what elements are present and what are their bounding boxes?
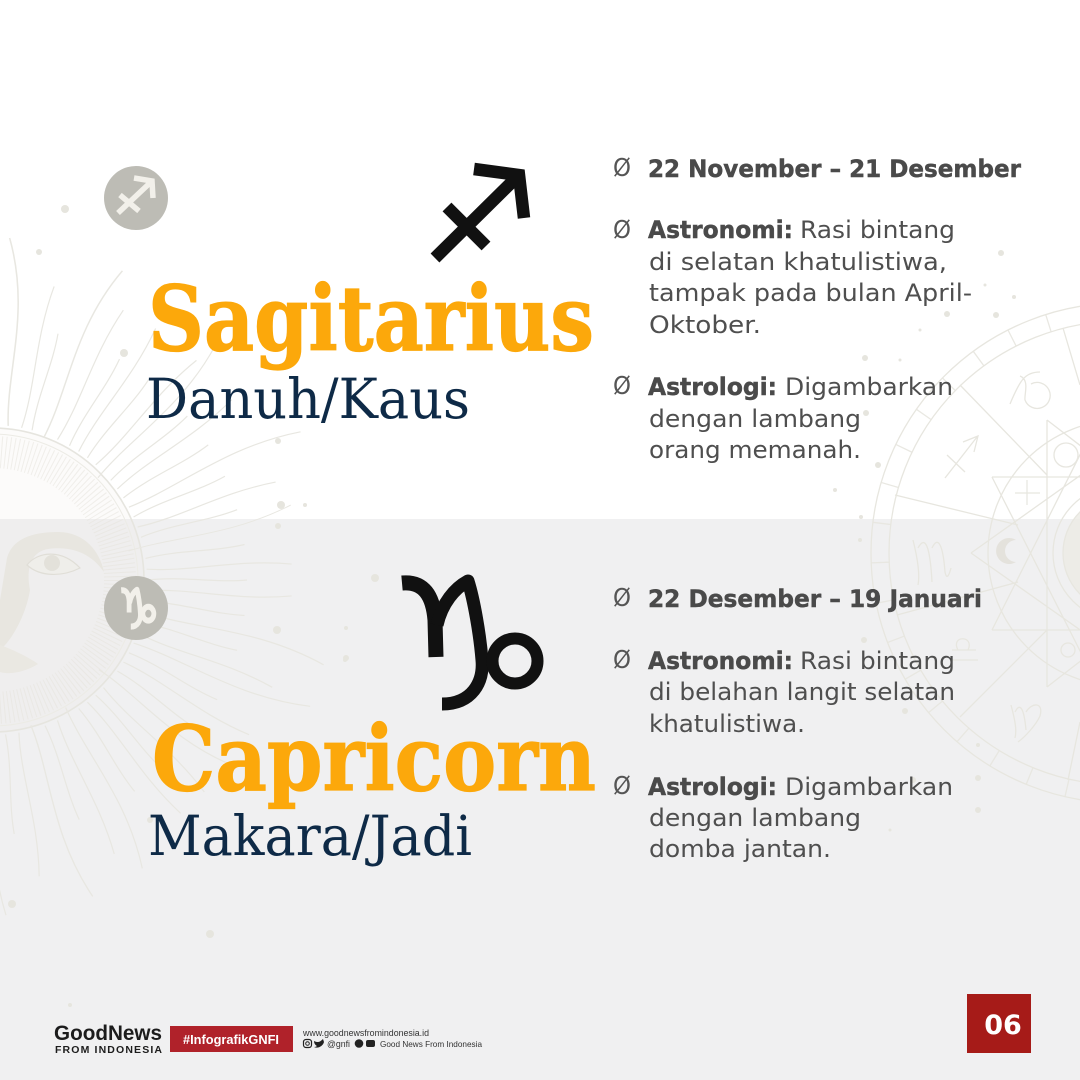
text block: astronomi: Rasi bintang bbox=[800, 647, 955, 675]
background lower panel bbox=[0, 519, 1080, 1080]
text block: astronomi bbox=[613, 215, 972, 339]
subheading: Makara/Jadi: Makara/Jadi bbox=[148, 804, 472, 868]
page number bbox=[967, 994, 1031, 1053]
section: Capricorn bbox=[104, 576, 982, 868]
text block: astronomi: di belahan langit selatan bbox=[649, 678, 955, 706]
text block: date: 22 Desember – 19 Januari bbox=[648, 585, 982, 613]
text block: astronomi: tampak pada bulan April- bbox=[649, 279, 972, 307]
footer bbox=[54, 994, 1031, 1056]
text block: astrologi bbox=[613, 771, 953, 863]
text block: astronomi: Astronomi: bbox=[648, 647, 793, 675]
text block: astrologi: Digambarkan bbox=[785, 373, 953, 401]
text block: astronomi: Rasi bintang bbox=[800, 216, 955, 244]
text block: astronomi: Oktober. bbox=[649, 311, 761, 339]
decoration: zodiac wheel bbox=[871, 303, 1080, 803]
logo: GoodNews From Indonesia: GoodNews bbox=[54, 1022, 162, 1045]
website and social handles: @gnfi bbox=[327, 1039, 350, 1049]
text block: astrologi: Ø bbox=[613, 371, 631, 400]
icon: small capricorn badge bbox=[104, 576, 168, 640]
logo: GoodNews From Indonesia: FROM INDONESIA bbox=[55, 1044, 162, 1056]
text block: date: 22 November – 21 Desember bbox=[648, 155, 1021, 183]
heading: Sagitarius: Sagitarius bbox=[148, 266, 594, 372]
decoration: star dust dots bbox=[8, 205, 1016, 1007]
text block: astronomi bbox=[613, 645, 955, 738]
hashtag badge bbox=[170, 1026, 293, 1052]
text block: astronomi: di selatan khatulistiwa, bbox=[649, 248, 947, 276]
website and social handles: www.goodnewsfromindonesia.id bbox=[302, 1028, 429, 1038]
section: Sagitarius bbox=[104, 153, 1021, 464]
text block: astronomi: Astronomi: bbox=[648, 216, 793, 244]
text block: astrologi: Digambarkan bbox=[785, 773, 953, 801]
text block: astrologi bbox=[613, 371, 953, 464]
page number: 06 bbox=[984, 1010, 1022, 1041]
text block: astronomi: Ø bbox=[613, 645, 631, 674]
text block: astrologi: Astrologi: bbox=[648, 773, 777, 801]
heading: Capricorn: Capricorn bbox=[152, 706, 596, 812]
text block: astrologi: Ø bbox=[613, 771, 631, 800]
sun face bbox=[0, 532, 104, 673]
text block: astrologi: domba jantan. bbox=[649, 835, 831, 863]
text block: date: Ø bbox=[613, 153, 631, 182]
text block: astrologi: dengan lambang bbox=[649, 405, 861, 433]
decoration: engraved sun bbox=[0, 238, 327, 915]
logo: GoodNews From Indonesia bbox=[54, 1022, 162, 1056]
text block: astronomi: khatulistiwa. bbox=[649, 710, 805, 738]
website and social handles bbox=[302, 1028, 482, 1049]
website and social handles: Good News From Indonesia bbox=[380, 1039, 482, 1049]
text block: astronomi: Ø bbox=[613, 215, 631, 244]
text block: astrologi: dengan lambang bbox=[649, 804, 861, 832]
wheel zodiac glyphs bbox=[913, 372, 1078, 742]
sun rays bbox=[0, 238, 327, 915]
icon: small sagittarius badge bbox=[104, 166, 168, 230]
icon: large capricorn symbol bbox=[402, 581, 538, 704]
text block: date: Ø bbox=[613, 583, 631, 612]
subheading: Danuh/Kaus: Danuh/Kaus bbox=[146, 367, 470, 431]
text block: astrologi: Astrologi: bbox=[648, 373, 777, 401]
hashtag badge: #InfografikGNFI bbox=[183, 1033, 279, 1047]
sun disc bbox=[0, 428, 144, 732]
text block: astrologi: orang memanah. bbox=[649, 436, 861, 464]
icon: large sagittarius symbol bbox=[435, 169, 524, 258]
